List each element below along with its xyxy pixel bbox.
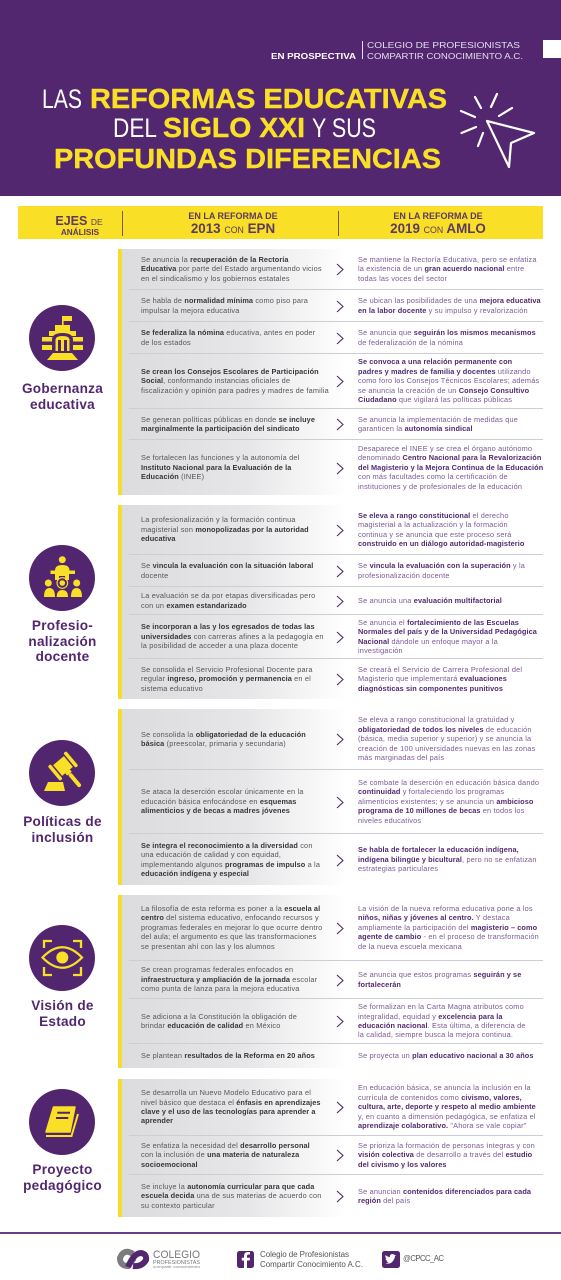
text 2013 xyxy=(141,1175,322,1217)
text 2013: aprender xyxy=(141,1116,173,1125)
text 2013: Se generan políticas públicas en donde se incluye xyxy=(141,415,315,424)
text 2013: Se crean programas federales enfocados en xyxy=(141,965,293,974)
text 2013: la posibilidad de acceder a una plaza docente xyxy=(141,641,298,650)
footer xyxy=(0,1232,561,1280)
text 2013: Se anuncia la recuperación de la Rectoría xyxy=(141,255,289,264)
text 2013: Se consolida el Servicio Profesional Docente para xyxy=(141,665,313,674)
column headings: EN LA REFORMA DE xyxy=(393,211,483,221)
row xyxy=(0,1079,561,1135)
text 2019 xyxy=(358,255,537,283)
text 2013: impulsar la mejora educativa xyxy=(141,306,240,314)
text 2019: La visión de la nueva reforma educativa pone a los xyxy=(358,904,533,913)
panel background xyxy=(122,709,347,885)
logo and social links: Compartir Conocimiento A.C. xyxy=(260,1260,363,1269)
text 2013: regular ingreso, promoción y permanencia en el xyxy=(141,674,311,683)
label: Profesionalización docente xyxy=(28,618,97,664)
text 2013 xyxy=(141,415,315,433)
icon: school building xyxy=(29,305,95,371)
text 2019: creación de 100 universidades nuevas en las zonas xyxy=(358,744,535,753)
column headings: 2013 CON EPN xyxy=(191,221,275,236)
text 2019: la calidad, siempre busca la mejora continua. xyxy=(358,1030,513,1039)
row xyxy=(0,1175,561,1217)
text 2019: agente de cambio - en el proceso de transformación xyxy=(358,932,539,941)
text 2013 xyxy=(141,296,308,314)
logo and social links: COLEGIO xyxy=(153,1249,200,1261)
text 2019: Se habla de fortalecer la educación indígena, xyxy=(358,845,519,854)
logo and social links: Colegio de Profesionistas xyxy=(260,1250,349,1259)
text 2019: en la labor docente y su impulso y revalorización xyxy=(358,306,528,314)
text 2013: Se enfatiza la necesidad del desarrollo personal xyxy=(141,1141,310,1150)
text 2019: Desaparece el INEE y se crea el órgano autónomo xyxy=(358,444,532,453)
label: Políticas de inclusión: Políticas de xyxy=(23,814,102,829)
title and branding: REFORMAS EDUCATIVAS xyxy=(90,83,447,114)
text 2019 xyxy=(358,296,541,314)
arrow xyxy=(336,733,344,746)
table header bar xyxy=(18,206,543,239)
text 2013 xyxy=(141,1079,321,1135)
icon: eye xyxy=(29,925,95,991)
text 2013: clave y el uso de las tecnologías para aprender a xyxy=(141,1107,316,1116)
text 2019: Se anuncia la implementación de medidas que xyxy=(358,415,518,424)
text 2013: Educativa por parte del Estado argumentando vicios xyxy=(141,264,322,273)
arrow xyxy=(336,594,344,608)
panel: Políticas de inclusión xyxy=(0,709,561,885)
column headings: 2019 CON AMLO xyxy=(390,221,486,236)
text 2019: Se proyecta un plan educativo nacional a 30 años xyxy=(358,1051,534,1060)
text 2013: infraestructura y ampliación de la jornada escolar xyxy=(141,975,317,984)
text 2013: escuela decida una de sus materias de acuerdo con xyxy=(141,1191,322,1200)
text 2013: marginalmente la participación del sindicato xyxy=(141,424,300,433)
text 2013: socioemocional xyxy=(141,1160,198,1169)
label: Políticas de inclusión xyxy=(0,814,125,845)
text 2013 xyxy=(141,961,317,998)
label: Profesionalización docente: Profesio- xyxy=(32,618,93,633)
row xyxy=(0,659,561,699)
title and branding: DEL xyxy=(113,113,157,143)
arrow xyxy=(336,462,344,474)
row xyxy=(0,834,561,885)
panel background xyxy=(122,1079,347,1217)
text 2019 xyxy=(358,444,543,491)
text 2013: Social, conformando instancias oficiales de xyxy=(141,376,290,385)
text 2019: integralidad, equidad y excelencia para la xyxy=(358,1012,503,1021)
accent bar xyxy=(118,895,122,1068)
text 2013: docente xyxy=(141,570,168,580)
text 2019 xyxy=(358,415,518,433)
text 2013 xyxy=(141,770,304,833)
text 2013 xyxy=(141,615,324,658)
text 2019 xyxy=(358,328,536,346)
text 2019 xyxy=(358,1136,535,1174)
row xyxy=(0,999,561,1043)
row xyxy=(0,961,561,998)
row xyxy=(0,770,561,833)
text 2019: región del país xyxy=(358,1196,410,1205)
text 2019: de la nueva escuela mexicana xyxy=(358,942,462,951)
text 2019: estrategias particulares xyxy=(358,864,438,873)
text 2013: brindar educación de calidad en México xyxy=(141,1021,281,1030)
text 2013: Se incluye la autonomía curricular para que cada xyxy=(141,1182,314,1191)
arrow xyxy=(336,1101,344,1114)
text 2013: Se ataca la deserción escolar únicamente en la xyxy=(141,787,304,796)
text 2019 xyxy=(358,1175,531,1217)
arrow xyxy=(336,376,344,388)
panel: Visión de Estado xyxy=(0,895,561,1068)
title and branding: EN PROSPECTIVA xyxy=(271,51,356,61)
text 2013: como punta de lanza para la mejora educativa xyxy=(141,984,300,993)
text 2013: Se habla de normalidad mínima como piso para xyxy=(141,296,308,305)
text 2019: del civismo y los valores xyxy=(358,1160,447,1169)
arrow xyxy=(336,332,344,344)
row xyxy=(141,255,537,283)
column headings xyxy=(55,211,486,237)
text 2013: magisterial son monopolizadas por la autoridad xyxy=(141,525,309,534)
title and branding: PROFUNDAS DIFERENCIAS xyxy=(54,143,441,174)
title and branding: SIGLO XXI xyxy=(163,112,305,143)
text 2019 xyxy=(358,999,526,1043)
text 2019 xyxy=(358,834,537,885)
text 2013: una educación de calidad y con equidad, xyxy=(141,850,281,859)
label: Gobernanza educativa: educativa xyxy=(30,397,95,412)
text 2013: educación básica enfocándose en esquemas xyxy=(141,797,296,806)
text 2013 xyxy=(141,834,320,885)
text 2013 xyxy=(141,367,329,395)
text 2013 xyxy=(141,328,315,346)
text 2019: Se anuncian contenidos diferenciados para cada xyxy=(358,1187,531,1196)
row xyxy=(0,615,561,658)
text 2019: investigación xyxy=(358,646,403,655)
text 2019: aprendizaje colaborativo. "Ahora se vale copiar" xyxy=(358,1121,526,1130)
column headings: EJES DE xyxy=(55,214,103,228)
title and branding: COMPARTIR CONOCIMIENTO A.C. xyxy=(367,51,523,61)
text 2019: niveles educativos xyxy=(358,816,421,825)
row xyxy=(141,328,536,346)
panel background xyxy=(122,249,347,495)
row xyxy=(0,709,561,769)
text 2019: continuidad y fortaleciendo los programas xyxy=(358,787,504,796)
text 2019: cultura, arte, deporte y respeto al medio ambiente xyxy=(358,1102,536,1111)
text 2019: Se eleva a rango constitucional el derecho xyxy=(358,511,509,520)
arrow xyxy=(336,854,344,866)
label: Políticas de inclusión: inclusión xyxy=(32,830,93,845)
text 2013 xyxy=(141,895,322,960)
text 2019: garanticen la autonomía sindical xyxy=(358,424,473,433)
text 2019: obligatoriedad de todos los niveles de educación xyxy=(358,725,532,734)
text 2013: Se plantean resultados de la Reforma en 20 años xyxy=(141,1051,315,1060)
text 2019: (básica, media superior y superior) y se anuncia la xyxy=(358,734,531,743)
text 2013: alimenticios y de becas a madres jóvenes xyxy=(141,806,290,815)
text 2019: Se anuncia una evaluación multifactorial xyxy=(358,596,502,605)
arrow xyxy=(336,673,344,686)
text 2019: Se convoca a una relación permanente con xyxy=(358,357,512,366)
text 2019: profesionalización docente xyxy=(358,570,450,580)
text 2019: construido en un diálogo autoridad-magisterio xyxy=(358,539,524,548)
text 2019: fortalecerán xyxy=(358,980,401,988)
text 2013 xyxy=(141,515,309,543)
text 2013: centro del sistema educativo, enfocando recursos y xyxy=(141,913,319,922)
text 2013 xyxy=(141,1136,310,1174)
arrow xyxy=(336,922,344,934)
text 2019: alimenticios existentes; y se anuncia un ambicioso xyxy=(358,797,533,806)
text 2019: más marginadas del país xyxy=(358,753,444,762)
text 2013: Se desarrolla un Nuevo Modelo Educativo para el xyxy=(141,1088,311,1097)
row xyxy=(141,511,524,548)
arrow xyxy=(336,418,344,430)
arrow xyxy=(336,524,344,536)
label: Gobernanza educativa: Gobernanza xyxy=(22,381,103,396)
arrow xyxy=(336,566,344,578)
text 2013: Se integra el reconocimiento a la diversidad con xyxy=(141,841,313,850)
text 2019 xyxy=(358,659,522,699)
label: Proyecto pedagógico: Proyecto xyxy=(32,1162,93,1177)
logo and social links: PROFESIONISTAS xyxy=(153,1260,201,1266)
text 2019: Normales del país y de la Universidad Pedagógica xyxy=(358,627,537,636)
row xyxy=(141,561,525,580)
column headings: EN LA REFORMA DE xyxy=(188,211,278,221)
label: Visión de Estado: Visión de xyxy=(31,998,94,1013)
text 2019: ampliamente la participación del magisterio – como xyxy=(358,923,537,932)
accent bar xyxy=(118,249,122,495)
label: Profesionalización docente: docente xyxy=(36,649,89,664)
icon: book xyxy=(29,1089,95,1155)
arrow xyxy=(336,264,344,276)
text 2013: programas federales en mejorar lo que ocurre dentro xyxy=(141,923,322,932)
text 2019: Se prioriza la formación de personas íntegras y con xyxy=(358,1141,535,1150)
arrow xyxy=(336,974,344,986)
panel: Profesionalización docente xyxy=(28,505,543,699)
text 2019: Se anuncia el fortalecimiento de las Escuelas xyxy=(358,618,519,627)
text 2019: como foro los Consejos Técnicos Escolares; además xyxy=(358,376,539,385)
text 2019 xyxy=(358,961,521,998)
text 2019 xyxy=(358,895,539,960)
text 2019: Ciudadano que vigilará las políticas públicas xyxy=(358,395,512,404)
text 2013: su contexto particular xyxy=(141,1201,215,1210)
row xyxy=(141,444,543,491)
panel background xyxy=(122,505,347,699)
panel background xyxy=(122,895,347,1068)
text 2013: Educación (INEE) xyxy=(141,472,204,481)
title and branding: COLEGIO DE PROFESIONISTAS xyxy=(367,40,520,50)
row xyxy=(0,1044,561,1068)
text 2019: Magisterio que implementará evaluaciones xyxy=(358,674,507,683)
text 2019: instituciones y de profesionales de la educación xyxy=(358,482,522,491)
arrow xyxy=(336,300,344,312)
text 2019 xyxy=(358,709,535,769)
text 2019: con más facultades como la certificación de xyxy=(358,472,508,481)
text 2013: se presentan ahí con las y los alumnos xyxy=(141,942,275,951)
text 2013: educativa xyxy=(141,534,176,543)
row xyxy=(0,895,561,960)
text 2019: Se anuncia que seguirán los mismos mecanismos xyxy=(358,328,536,337)
text 2013: básica (preescolar, primaria y secundaria) xyxy=(141,739,286,748)
accent bar xyxy=(118,505,122,699)
logo and social links: compartir conocimiento xyxy=(153,1265,200,1269)
row xyxy=(141,357,539,404)
text 2019: indígena bilingüe y bicultural, pero no se enfatizan xyxy=(358,855,537,864)
column headings: ANÁLISIS xyxy=(61,227,100,237)
text 2019: programa de 10 millones de becas en todos los xyxy=(358,806,525,815)
text 2019: Se formalizan en la Carta Magna atributos como xyxy=(358,1002,524,1011)
arrow xyxy=(336,1149,344,1162)
label: Visión de Estado: Estado xyxy=(39,1014,86,1029)
footer rule xyxy=(0,1232,561,1234)
text 2013 xyxy=(141,255,322,283)
text 2013 xyxy=(141,561,313,580)
text 2019: continua y se anuncia que este proceso será xyxy=(358,530,512,538)
text 2013: nivel básico que destaca el énfasis en aprendizajes xyxy=(141,1098,321,1107)
text 2019: niños, niñas y jóvenes al centro. Y destaca xyxy=(358,913,510,922)
text 2019 xyxy=(358,615,537,658)
label: Proyecto pedagógico: pedagógico xyxy=(23,1178,102,1193)
text 2019: Se mantiene la Rectoría Educativa, pero se enfatiza xyxy=(358,255,537,264)
text 2019: todas las voces del sector xyxy=(358,274,447,283)
text 2019: Se vincula la evaluación con la superación y la xyxy=(358,561,525,570)
text 2019: denominado Centro Nacional para la Revalorización xyxy=(358,453,541,462)
title and branding: LAS xyxy=(42,84,82,114)
header banner xyxy=(0,0,561,196)
text 2013: fiscalización y opinión para padres y madres de familia xyxy=(141,386,329,395)
accent bar xyxy=(118,1079,122,1217)
text 2019: visión colectiva de desarrollo a través del estudio xyxy=(358,1150,532,1159)
text 2013: con un examen estandarizado xyxy=(141,600,247,610)
text 2019: Se creará el Servicio de Carrera Profesional del xyxy=(358,665,522,674)
text 2019 xyxy=(358,357,539,404)
panel: Proyecto pedagógico xyxy=(0,1079,561,1217)
arrow xyxy=(336,1015,344,1028)
label: Proyecto pedagógico xyxy=(0,1162,125,1193)
text 2019: Se eleva a rango constitucional la gratuidad y xyxy=(358,715,514,724)
text 2013: sistema educativo xyxy=(141,684,203,693)
text 2019: de federalización de la nómina xyxy=(358,338,463,346)
text 2019: educación nacional. Esta última, a diferencia de xyxy=(358,1021,526,1030)
row xyxy=(0,1136,561,1174)
text 2013: Se federaliza la nómina educativa, antes en poder xyxy=(141,328,315,337)
text 2019: Se combate la deserción en educación básica dando xyxy=(358,778,539,787)
text 2019: Se ubican las posibilidades de una mejora educativa xyxy=(358,296,541,305)
arrow xyxy=(336,630,344,644)
text 2013: universidades con carreras afines a la pedagogía en xyxy=(141,632,324,641)
text 2013: educación indígena y especial xyxy=(141,869,249,878)
title and branding xyxy=(42,40,561,174)
arrow xyxy=(336,1190,344,1203)
text 2019: currícula de contenidos como civismo, valores, xyxy=(358,1093,522,1102)
text 2013: Se consolida la obligatoriedad de la educación xyxy=(141,730,306,739)
text 2013 xyxy=(141,999,297,1043)
text 2013: La filosofía de esta reforma es poner a la escuela al xyxy=(141,904,320,913)
text 2013: Se adiciona a la Constitución la obligación de xyxy=(141,1012,297,1021)
text 2013: Se vincula la evaluación con la situación laboral xyxy=(141,561,313,570)
label: Visión de Estado xyxy=(0,998,125,1029)
logo and social links: @CPCC_AC xyxy=(403,1254,444,1263)
title and branding: Y SUS xyxy=(312,113,376,143)
icon: gavel xyxy=(29,740,95,806)
row xyxy=(0,587,561,614)
text 2013: de los estados xyxy=(141,338,191,346)
text 2019: y, en cuanto a dimensión pedagógica, se enfatiza el xyxy=(358,1112,536,1121)
text 2019: diagnósticas sin componentes punitivos xyxy=(358,684,503,693)
label: Profesionalización docente: nalización xyxy=(28,634,97,649)
text 2019: En educación básica, se anuncia la inclusión en la xyxy=(358,1083,531,1092)
text 2013: del aula; el argumento es que las transformaciones xyxy=(141,932,317,941)
text 2013: Se fortalecen las funciones y la autonomía del xyxy=(141,453,300,462)
text 2013 xyxy=(141,453,300,481)
text 2013: La evaluación se da por etapas diversificadas pero xyxy=(141,591,315,600)
text 2019: la existencia de un gran acuerdo nacional entre xyxy=(358,264,524,273)
text 2019: magisterial a la actualización y la formación xyxy=(358,520,508,529)
arrow xyxy=(336,796,344,808)
icon: teacher and students xyxy=(29,545,95,611)
label: Gobernanza educativa xyxy=(22,381,103,412)
text 2013 xyxy=(141,587,315,614)
text 2013: Se crean los Consejos Escolares de Participación xyxy=(141,367,319,376)
text 2013: en el sindicalismo y los gobiernos estatales xyxy=(141,274,290,283)
text 2019 xyxy=(358,1079,536,1135)
text 2019 xyxy=(358,770,539,833)
text 2019: del Magisterio y la Mejora Continua de la Educación xyxy=(358,463,543,472)
text 2013: La profesionalización y la formación continua xyxy=(141,515,296,524)
row xyxy=(141,296,541,314)
text 2013: con la inclusión de una materia de naturaleza xyxy=(141,1150,299,1159)
text 2013: implementando algunos programas de impulso a la xyxy=(141,860,320,868)
text 2013: Se incorporan a las y los egresados de todas las xyxy=(141,622,315,631)
text 2019 xyxy=(358,511,524,548)
text 2019: Nacional dándole un enfoque mayor a la xyxy=(358,636,498,646)
panel: Gobernanza educativa xyxy=(22,249,543,495)
text 2019: padres y madres de familia y docentes utilizando xyxy=(358,367,531,376)
text 2013 xyxy=(141,709,306,769)
accent bar xyxy=(118,709,122,885)
text 2019 xyxy=(358,561,525,580)
text 2019: Se anuncia que estos programas seguirán y se xyxy=(358,970,521,979)
text 2013: Instituto Nacional para la Evaluación de la xyxy=(141,463,291,472)
row xyxy=(141,415,518,433)
text 2019: se anuncia la creación de un Consejo Consultivo xyxy=(358,386,529,395)
text 2013 xyxy=(141,659,313,699)
